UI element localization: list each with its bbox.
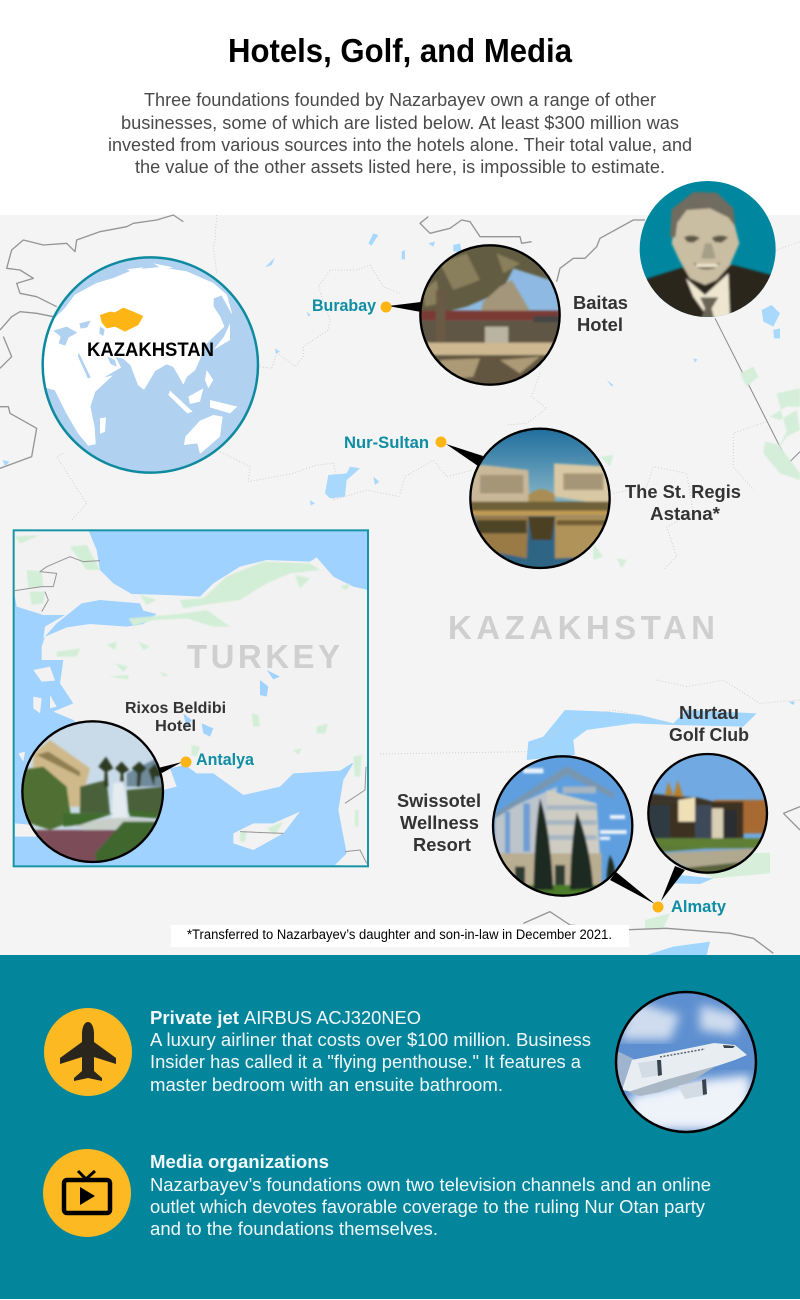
callout: Antalya / Rixos Beldibi Hotel <box>20 700 255 863</box>
hotel name: Nurtau: Golf Club <box>669 725 749 745</box>
text: media organizations <box>150 1152 711 1239</box>
land: Eurasia and Africa <box>42 267 232 445</box>
intro text: invested from various sources into the hotels alone. Their total value, and <box>108 135 692 155</box>
globe inset <box>42 257 258 473</box>
hotel name <box>125 700 226 735</box>
city label: Almaty: Almaty <box>671 897 727 916</box>
hotel name <box>625 482 741 524</box>
item: private jet <box>44 990 758 1134</box>
text: private jet: A luxury airliner that costs over $100 million. Business <box>150 1030 591 1050</box>
footnote: *Transferred to Nazarbayev’s daughter and son-in-law in December 2021. <box>187 927 612 942</box>
country label: Kazakhstan: KAZAKHSTAN <box>448 609 715 646</box>
photo: Rixos Beldibi Hotel <box>20 720 167 863</box>
photo: Nurtau Golf Club <box>647 753 770 877</box>
photo: Swissotel Wellness Resort <box>492 755 635 900</box>
callout: Nur-Sultan / The St. Regis Astana <box>344 427 741 571</box>
city label: Burabay: Burabay <box>312 296 377 315</box>
country label: Turkey: TURKEY <box>187 638 340 675</box>
globe label: KAZAKHSTAN <box>87 340 214 361</box>
hotel name: Rixos Beldibi <box>125 700 226 717</box>
text: private jet: Private jet <box>150 1008 239 1028</box>
hotel name: The St. Regis <box>625 482 741 502</box>
title: Hotels, Golf, and Media <box>228 32 573 69</box>
text: media organizations: and to the foundations themselves. <box>150 1219 438 1239</box>
photo: Baitas Hotel <box>417 242 563 388</box>
city label: Nur-Sultan: Nur-Sultan <box>344 433 429 452</box>
item: media organizations <box>43 1149 711 1239</box>
text: private jet <box>150 1008 591 1095</box>
photo: airbus jet <box>614 990 758 1134</box>
hotel name: Astana* <box>650 504 720 524</box>
intro text: the value of the other assets listed here, is impossible to estimate. <box>135 157 665 177</box>
photo: The St. Regis Astana <box>467 427 613 571</box>
text: private jet: master bedroom with an ensuite bathroom. <box>150 1075 503 1095</box>
text: private jet: Insider has called it a "flying penthouse." It features a <box>150 1052 582 1072</box>
inset map: Turkey <box>0 530 368 867</box>
hotel name: Baitas <box>573 293 628 313</box>
footnote <box>171 925 629 947</box>
callout: Burabay / Baitas Hotel <box>312 242 628 388</box>
text: media organizations: Nazarbayev’s foundations own two television channels and an online <box>150 1175 711 1195</box>
city label: Antalya: Antalya <box>196 750 255 769</box>
text: media organizations: Media organizations <box>150 1152 329 1172</box>
hotel name: Swissotel: Wellness <box>400 813 479 833</box>
text: media organizations: outlet which devotes favorable coverage to the ruling Nur Otan party <box>150 1197 705 1217</box>
panel: teal assets band <box>0 955 800 1299</box>
icon: airplane <box>44 1008 132 1096</box>
hotel name: Swissotel <box>397 791 481 855</box>
intro text: businesses, some of which are listed below. At least $300 million was <box>121 113 679 133</box>
callout: Almaty / Swissotel and Nurtau <box>397 703 770 916</box>
text: private jet: AIRBUS ACJ320NEO <box>244 1008 421 1028</box>
icon: television <box>43 1149 131 1237</box>
hotel name: Hotel <box>155 718 196 735</box>
hotel name: Nurtau: Nurtau <box>679 703 739 723</box>
hotel name: Nurtau <box>669 703 749 745</box>
intro text: Three foundations founded by Nazarbayev own a range of other <box>144 90 656 110</box>
map background <box>0 215 800 955</box>
hotel name <box>573 293 628 335</box>
hotel name: Swissotel: Resort <box>413 835 471 855</box>
hotel name: Hotel <box>577 315 623 335</box>
hotel name: Swissotel: Swissotel <box>397 791 481 811</box>
intro text <box>108 90 692 177</box>
Nazarbayev portrait <box>640 181 776 317</box>
